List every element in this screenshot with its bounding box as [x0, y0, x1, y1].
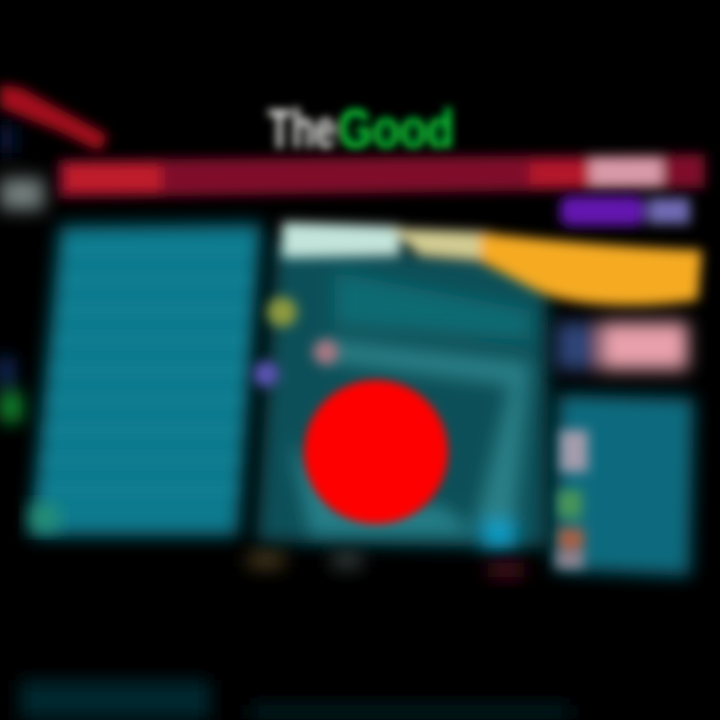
right column icons [556, 430, 588, 568]
right teal panel [554, 394, 694, 576]
centre small icons [253, 297, 339, 387]
centre inner blocks [290, 272, 530, 548]
left edge marks [0, 125, 44, 422]
red banner [58, 154, 705, 198]
title: The [268, 97, 336, 160]
cream to orange ribbon [282, 222, 702, 306]
bottom faint strip [20, 680, 570, 720]
left panel text texture [36, 250, 250, 490]
centre dark teal panel [256, 240, 548, 548]
bottom footnote marks [248, 552, 524, 578]
title [268, 97, 454, 160]
purple tag [560, 196, 690, 226]
title: Good [338, 97, 454, 160]
red diagonal accent [0, 84, 108, 152]
green mark in left panel [30, 505, 58, 530]
large red circle [304, 380, 448, 524]
left teal panel [30, 224, 262, 536]
right upper callouts [556, 322, 688, 370]
